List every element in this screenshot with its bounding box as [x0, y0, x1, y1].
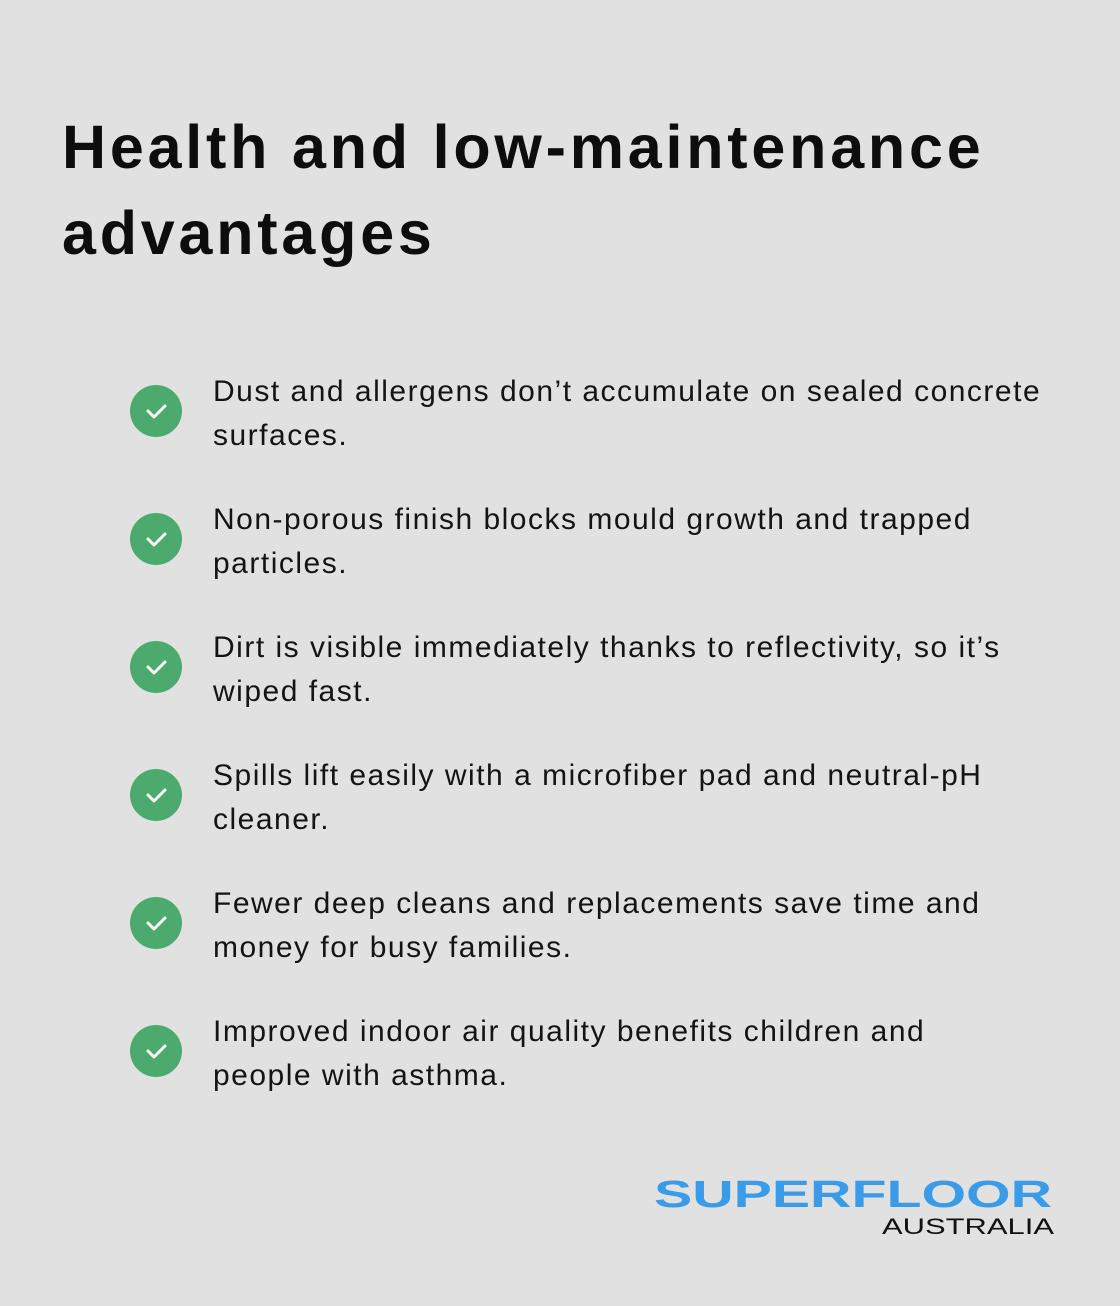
text — [213, 375, 1041, 452]
text — [213, 1015, 925, 1092]
item 3 — [130, 631, 1001, 708]
text: surfaces. — [213, 419, 348, 452]
title: Health and low-maintenance — [62, 113, 984, 181]
text: particles. — [213, 547, 348, 580]
text: wiped fast. — [213, 675, 373, 708]
icon: check — [130, 1025, 182, 1077]
item 2 — [130, 503, 972, 580]
text — [213, 503, 972, 580]
icon: check — [130, 513, 182, 565]
logo — [654, 1174, 1054, 1239]
icon: check — [130, 769, 182, 821]
icon: check — [130, 897, 182, 949]
item 6 — [130, 1015, 925, 1092]
item 4 — [130, 759, 982, 836]
title: advantages — [62, 199, 436, 267]
item 5 — [130, 887, 980, 964]
text — [213, 759, 982, 836]
logo: SUPERFLOOR — [654, 1174, 1052, 1216]
text: cleaner. — [213, 803, 330, 836]
text: Improved indoor air quality benefits children and — [213, 1015, 925, 1048]
text: Fewer deep cleans and replacements save time and — [213, 887, 980, 920]
text: Dust and allergens don’t accumulate on sealed concrete — [213, 375, 1041, 408]
text: Non-porous finish blocks mould growth and trapped — [213, 503, 972, 536]
item 1 — [130, 375, 1041, 452]
text: Dirt is visible immediately thanks to reflectivity, so it’s — [213, 631, 1001, 664]
title — [62, 113, 984, 267]
text: money for busy families. — [213, 931, 572, 964]
text — [213, 631, 1001, 708]
text: Spills lift easily with a microfiber pad and neutral-pH — [213, 759, 982, 792]
text: people with asthma. — [213, 1059, 508, 1092]
text — [213, 887, 980, 964]
icon: check — [130, 641, 182, 693]
icon: check — [130, 385, 182, 437]
logo: AUSTRALIA — [882, 1214, 1054, 1239]
